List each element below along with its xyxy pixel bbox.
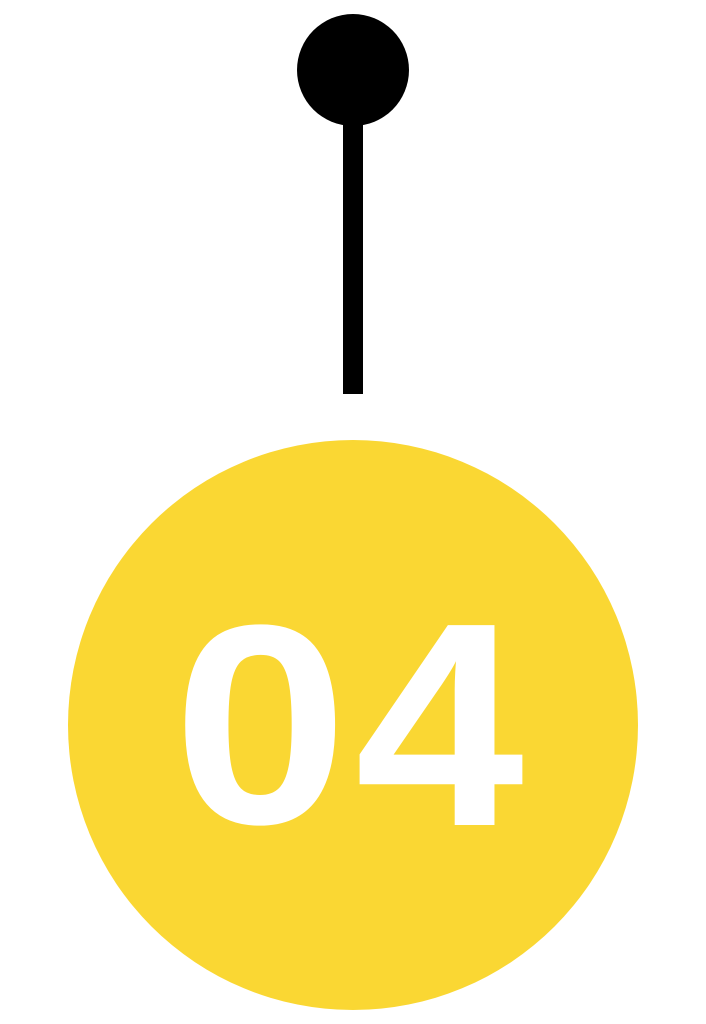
yellow number badge [68, 440, 638, 1010]
step number: 4 [355, 562, 526, 887]
step number [173, 562, 526, 887]
step number: 0 [173, 565, 348, 884]
icon: pin marker [297, 14, 409, 394]
